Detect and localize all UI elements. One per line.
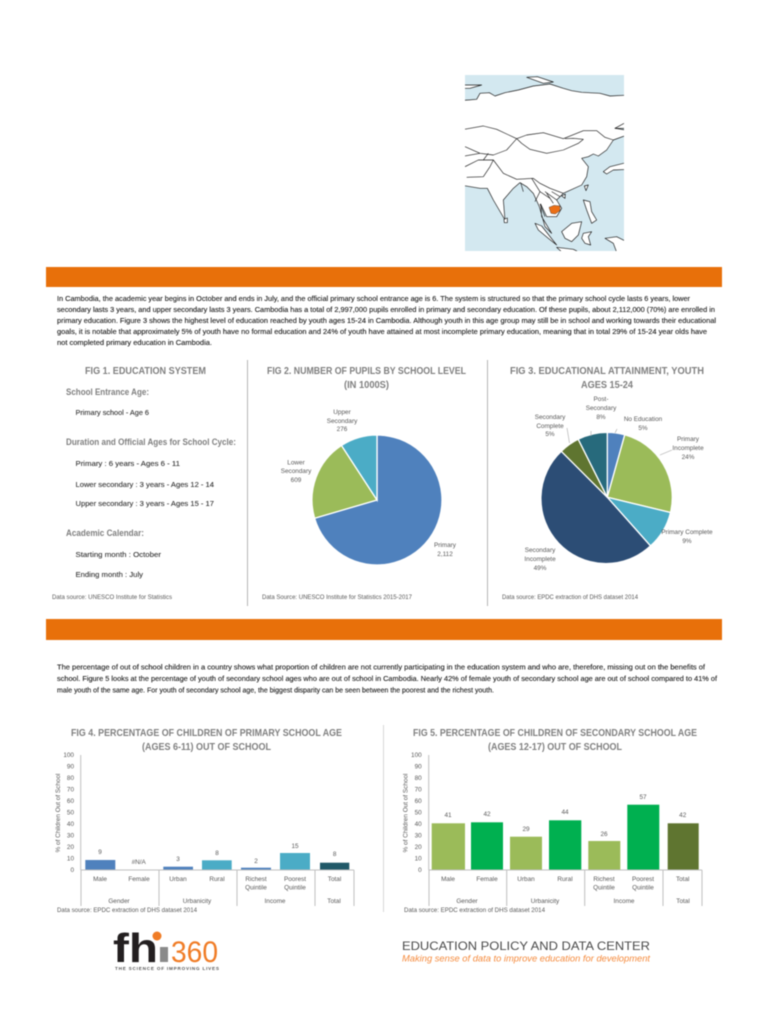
data source: Fig 5: Data source: EPDC extraction of DHS dataset 2014 [404, 907, 546, 914]
heading: Fig 4: FIG 4. PERCENTAGE OF CHILDREN OF PRIMARY SCHOOL AGE [71, 727, 342, 739]
category axis: Fig 5: Poorest [632, 876, 654, 883]
text block: duration and official ages: Upper secondary : 3 years - Ages 15 - 17 [76, 499, 214, 508]
label: post-secondary: Secondary [586, 405, 617, 412]
text block: education overview: primary education. Figure 3 shows the highest level of education reached by youth ages 15-24 in Cambodia. Although youth in this age group may still be in school and working towards their educational [57, 316, 716, 325]
heading: Fig 2 [267, 365, 466, 391]
category axis: Fig 4: Urbanicity [183, 898, 212, 905]
text block: school entrance age [66, 387, 149, 417]
y axis: percent: 30 [415, 832, 422, 840]
y axis: percent: 10 [67, 856, 74, 862]
pie chart: pupils by level [312, 435, 442, 565]
text block: education overview: not completed primary education in Cambodia. [57, 338, 212, 347]
label: secondary complete: Secondary [535, 414, 566, 421]
label: lower secondary: 609 [291, 477, 302, 484]
value labels: Fig 5: 57 [639, 794, 647, 801]
heading: Fig 5 [413, 727, 697, 753]
panel: Fig 3 educational attainment [502, 365, 713, 601]
value labels: Fig 5: 42 [483, 811, 491, 818]
text block: academic calendar: Starting month : October [76, 550, 162, 559]
category axis: Fig 4 [81, 870, 354, 906]
data source: Fig 4: Data source: EPDC extraction of DHS dataset 2014 [57, 907, 198, 914]
text block: duration and official ages: Primary : 6 years - Ages 6 - 11 [76, 459, 180, 468]
label: primary complete: 9% [682, 538, 692, 545]
y axis: percent: 40 [67, 821, 74, 828]
data source: Fig 3: Data source: EPDC extraction of DHS dataset 2014 [502, 594, 639, 601]
text block: education overview: secondary lasts 3 years, and upper secondary lasts 3 years. Cambodia has a total of 2,997,000 pupils enrolled in primary and secondary education. Of these pupils, about 2,112,000 (70%) are enrolled in [57, 305, 715, 314]
label: primary incomplete: 24% [682, 454, 695, 461]
text block: duration and official ages [66, 437, 236, 508]
heading: Fig 3: FIG 3. EDUCATIONAL ATTAINMENT, YOUTH [510, 365, 704, 377]
value labels: Fig 4: 8 [333, 851, 337, 858]
value labels: Fig 5: 44 [561, 809, 569, 816]
heading: Fig 1: FIG 1. EDUCATION SYSTEM [85, 365, 206, 377]
y axis: percent [402, 752, 429, 874]
text block: out of school overview: The percentage of out of school children in a country shows what proportion of children are not currently participating in the education system and who are, therefore, missing out on the benefits of [57, 662, 706, 672]
y axis: percent: 90 [67, 764, 74, 770]
y axis: percent [55, 752, 81, 874]
y axis: percent: 0 [418, 867, 422, 874]
label: secondary complete: 5% [545, 431, 555, 438]
logo: Education Policy and Data Center: EDUCATION POLICY AND DATA CENTER [402, 939, 650, 953]
y axis: percent: 80 [67, 775, 74, 782]
label: primary: 2,112 [437, 551, 453, 558]
y axis: percent: 20 [67, 844, 74, 851]
category axis: Fig 5: Quintile [593, 884, 615, 892]
label: upper secondary: 276 [337, 426, 348, 433]
category axis: Fig 4: Female [128, 876, 150, 883]
category axis: Fig 5: Income [614, 898, 635, 905]
text block: academic calendar [66, 528, 162, 579]
text block: academic calendar: Ending month : July [76, 570, 143, 579]
category axis: Fig 5: Total [676, 898, 690, 905]
orange banner: section one [46, 267, 722, 287]
heading: Fig 3 [510, 365, 704, 391]
category axis: Fig 4: Gender [108, 898, 131, 905]
label: lower secondary: Lower [287, 460, 306, 466]
panel: Fig 5 secondary out of school [402, 727, 702, 914]
category axis: Fig 5: Urban [517, 876, 535, 883]
category axis: Fig 4: Male [93, 876, 107, 883]
heading: Fig 5: FIG 5. PERCENTAGE OF CHILDREN OF SECONDARY SCHOOL AGE [413, 727, 697, 739]
category axis: Fig 5: Female [476, 876, 498, 883]
label: primary: Primary [434, 542, 457, 549]
y axis: percent: 30 [67, 832, 74, 840]
category axis: Fig 5: Total [676, 876, 689, 883]
heading: Fig 5: (AGES 12-17) OUT OF SCHOOL [488, 741, 622, 753]
label: post-secondary: 8% [596, 414, 606, 421]
heading: Fig 4: (AGES 6-11) OUT OF SCHOOL [142, 741, 271, 753]
category axis: Fig 4: Income [265, 898, 286, 905]
y axis: percent: 70 [415, 786, 422, 794]
text block: education overview: In Cambodia, the academic year begins in October and ends in July, and the official primary school entrance age is 6. The system is structured so that the primary school cycle lasts 6 years, lower [57, 294, 690, 303]
category axis: Fig 5: Quintile [632, 884, 654, 892]
data source: Fig 2: Data Source: UNESCO Institute for Statistics 2015-2017 [262, 594, 413, 601]
category axis: Fig 5 [429, 870, 702, 906]
category axis: Fig 5: Gender [456, 898, 479, 905]
y axis: percent: 40 [415, 821, 422, 828]
logo: FHI 360: 360 [171, 936, 218, 969]
y axis: percent: 60 [67, 798, 74, 805]
text block: duration and official ages: Lower secondary : 3 years - Ages 12 - 14 [76, 480, 214, 489]
y axis: percent: 100 [63, 752, 74, 759]
logo: Education Policy and Data Center: Making sense of data to improve education for development [402, 954, 651, 964]
data source: Fig 1: Data source: UNESCO Institute for Statistics [52, 594, 172, 601]
label: secondary incomplete: Secondary [525, 547, 556, 554]
text block: school entrance age: Primary school - Age 6 [76, 408, 149, 417]
category axis: Fig 5: Richest [593, 876, 615, 883]
y axis: percent: 90 [415, 764, 422, 770]
text block: school entrance age: School Entrance Age: [66, 387, 149, 397]
category axis: Fig 4: Quintile [284, 884, 306, 892]
text block: out of school overview [57, 662, 718, 694]
panel: Fig 4 primary out of school [55, 727, 354, 914]
y axis: percent: 0 [70, 867, 74, 874]
text block: education overview: goals, it is notable that approximately 5% of youth have no formal education and 24% of youth have attained at most incomplete primary education, meaning that in total 29% of 15-24 year olds have [57, 327, 707, 336]
logo: FHI 360: THE SCIENCE OF IMPROVING LIVES [115, 966, 219, 971]
category axis: Fig 4: Urban [169, 876, 187, 883]
category axis: Fig 4: Total [327, 898, 341, 905]
orange banner: section two [46, 619, 722, 640]
category axis: Fig 4: Poorest [284, 876, 306, 883]
y axis: percent: 50 [67, 810, 74, 816]
value labels: Fig 4 [98, 843, 337, 866]
value labels: Fig 4: #N/A [132, 859, 147, 866]
heading: Fig 3: AGES 15-24 [581, 379, 633, 391]
label: primary incomplete: Primary [677, 436, 700, 443]
value labels: Fig 5: 29 [522, 826, 530, 833]
map: Asia with Cambodia highlighted [460, 75, 630, 257]
value labels: Fig 4: 9 [98, 849, 102, 856]
value labels: Fig 5: 42 [679, 812, 687, 819]
value labels: Fig 4: 2 [254, 858, 258, 865]
label: primary incomplete: Incomplete [672, 445, 704, 452]
value labels: Fig 5: 26 [600, 831, 608, 838]
category axis: Fig 5: Urbanicity [531, 898, 560, 905]
label: primary complete: Primary Complete [661, 529, 713, 536]
category axis: Fig 5: Male [441, 876, 455, 883]
y axis: percent: % of Children Out of School [402, 774, 410, 852]
label: no education: No Education [624, 416, 663, 423]
heading: Fig 2: FIG 2. NUMBER OF PUPILS BY SCHOOL LEVEL [267, 365, 466, 377]
y axis: percent: 80 [415, 775, 422, 782]
y axis: percent: 10 [415, 856, 422, 862]
category axis: Fig 4: Richest [245, 876, 267, 883]
label: upper secondary: Secondary [327, 418, 358, 425]
logo: Education Policy and Data Center [402, 939, 651, 964]
text block: education overview [57, 294, 716, 347]
y axis: percent: 50 [415, 810, 422, 816]
label: secondary incomplete: Incomplete [524, 556, 556, 563]
category axis: Fig 4: Total [328, 876, 341, 883]
heading: Fig 4 [71, 727, 342, 753]
text block: duration and official ages: Duration and Official Ages for School Cycle: [66, 437, 236, 447]
bar chart: secondary out of school [432, 805, 699, 870]
value labels: Fig 4: 3 [176, 856, 180, 863]
pie chart: attainment [541, 432, 672, 564]
y axis: percent: 100 [411, 752, 422, 759]
text block: out of school overview: male youth of the same age. For youth of secondary school age, the biggest disparity can be seen between the poorest and the richest youth. [57, 686, 494, 694]
label: secondary incomplete: 49% [534, 565, 547, 572]
heading: Fig 2: (IN 1000S) [344, 379, 389, 391]
logo: FHI 360 [113, 925, 219, 971]
category axis: Fig 4: Rural [209, 876, 225, 883]
value labels: Fig 5 [444, 794, 687, 838]
label: secondary complete: Complete [536, 423, 564, 430]
label: upper secondary: Upper [333, 409, 352, 416]
category axis: Fig 5: Rural [557, 876, 573, 883]
category axis: Fig 4: Quintile [245, 884, 267, 892]
panel: Fig 1 education system [52, 365, 236, 601]
y axis: percent: 70 [67, 786, 74, 794]
y axis: percent: 60 [415, 798, 422, 805]
panel: Fig 2 number of pupils [262, 365, 466, 601]
value labels: Fig 4: 15 [291, 843, 299, 850]
y axis: percent: 20 [415, 844, 422, 851]
text block: academic calendar: Academic Calendar: [66, 528, 144, 538]
label: no education: 5% [638, 425, 648, 432]
bar chart: primary out of school [85, 853, 349, 870]
y axis: percent: % of Children Out of School [55, 774, 62, 852]
label: lower secondary: Secondary [281, 468, 312, 475]
text block: out of school overview: school. Figure 5 looks at the percentage of youth of secondary school ages who are out of school in Cambodia. Nearly 42% of female youth of secondary school age are out of school compared to 41% of [57, 674, 718, 683]
value labels: Fig 5: 41 [444, 812, 452, 819]
value labels: Fig 4: 8 [215, 850, 219, 857]
label: post-secondary: Post- [594, 396, 608, 403]
logo: FHI 360: fh [113, 925, 158, 971]
